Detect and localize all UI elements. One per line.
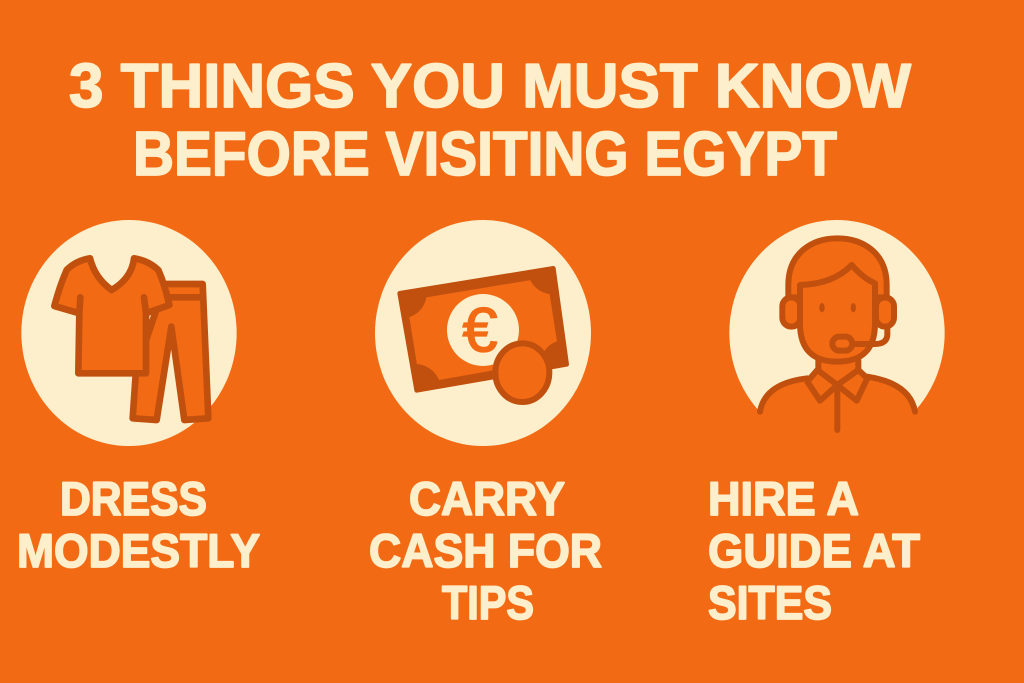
label: hire a guide at sites: SITES	[708, 576, 832, 629]
label: carry cash for tips: CARRY	[409, 472, 565, 525]
panel: hire a guide	[708, 220, 945, 629]
label: dress modestly: MODESTLY	[17, 524, 260, 577]
label: dress modestly: DRESS	[60, 472, 207, 525]
icon: banknote and coin	[375, 220, 591, 446]
icon: guide with headset	[729, 220, 945, 450]
panel: dress modestly	[17, 220, 260, 577]
label: carry cash for tips: TIPS	[442, 576, 534, 629]
icon: clothing	[21, 220, 237, 446]
label: carry cash for tips	[369, 472, 602, 629]
title	[69, 52, 911, 189]
label: hire a guide at sites: GUIDE AT	[708, 524, 920, 577]
title: 3 THINGS YOU MUST KNOW	[69, 52, 911, 121]
label: hire a guide at sites	[708, 472, 920, 629]
panel: carry cash	[369, 220, 602, 629]
title: BEFORE VISITING EGYPT	[133, 120, 837, 189]
label: dress modestly	[17, 472, 260, 577]
label: carry cash for tips: CASH FOR	[369, 524, 602, 577]
icon: banknote and coin: €	[462, 295, 498, 365]
label: hire a guide at sites: HIRE A	[708, 472, 859, 525]
